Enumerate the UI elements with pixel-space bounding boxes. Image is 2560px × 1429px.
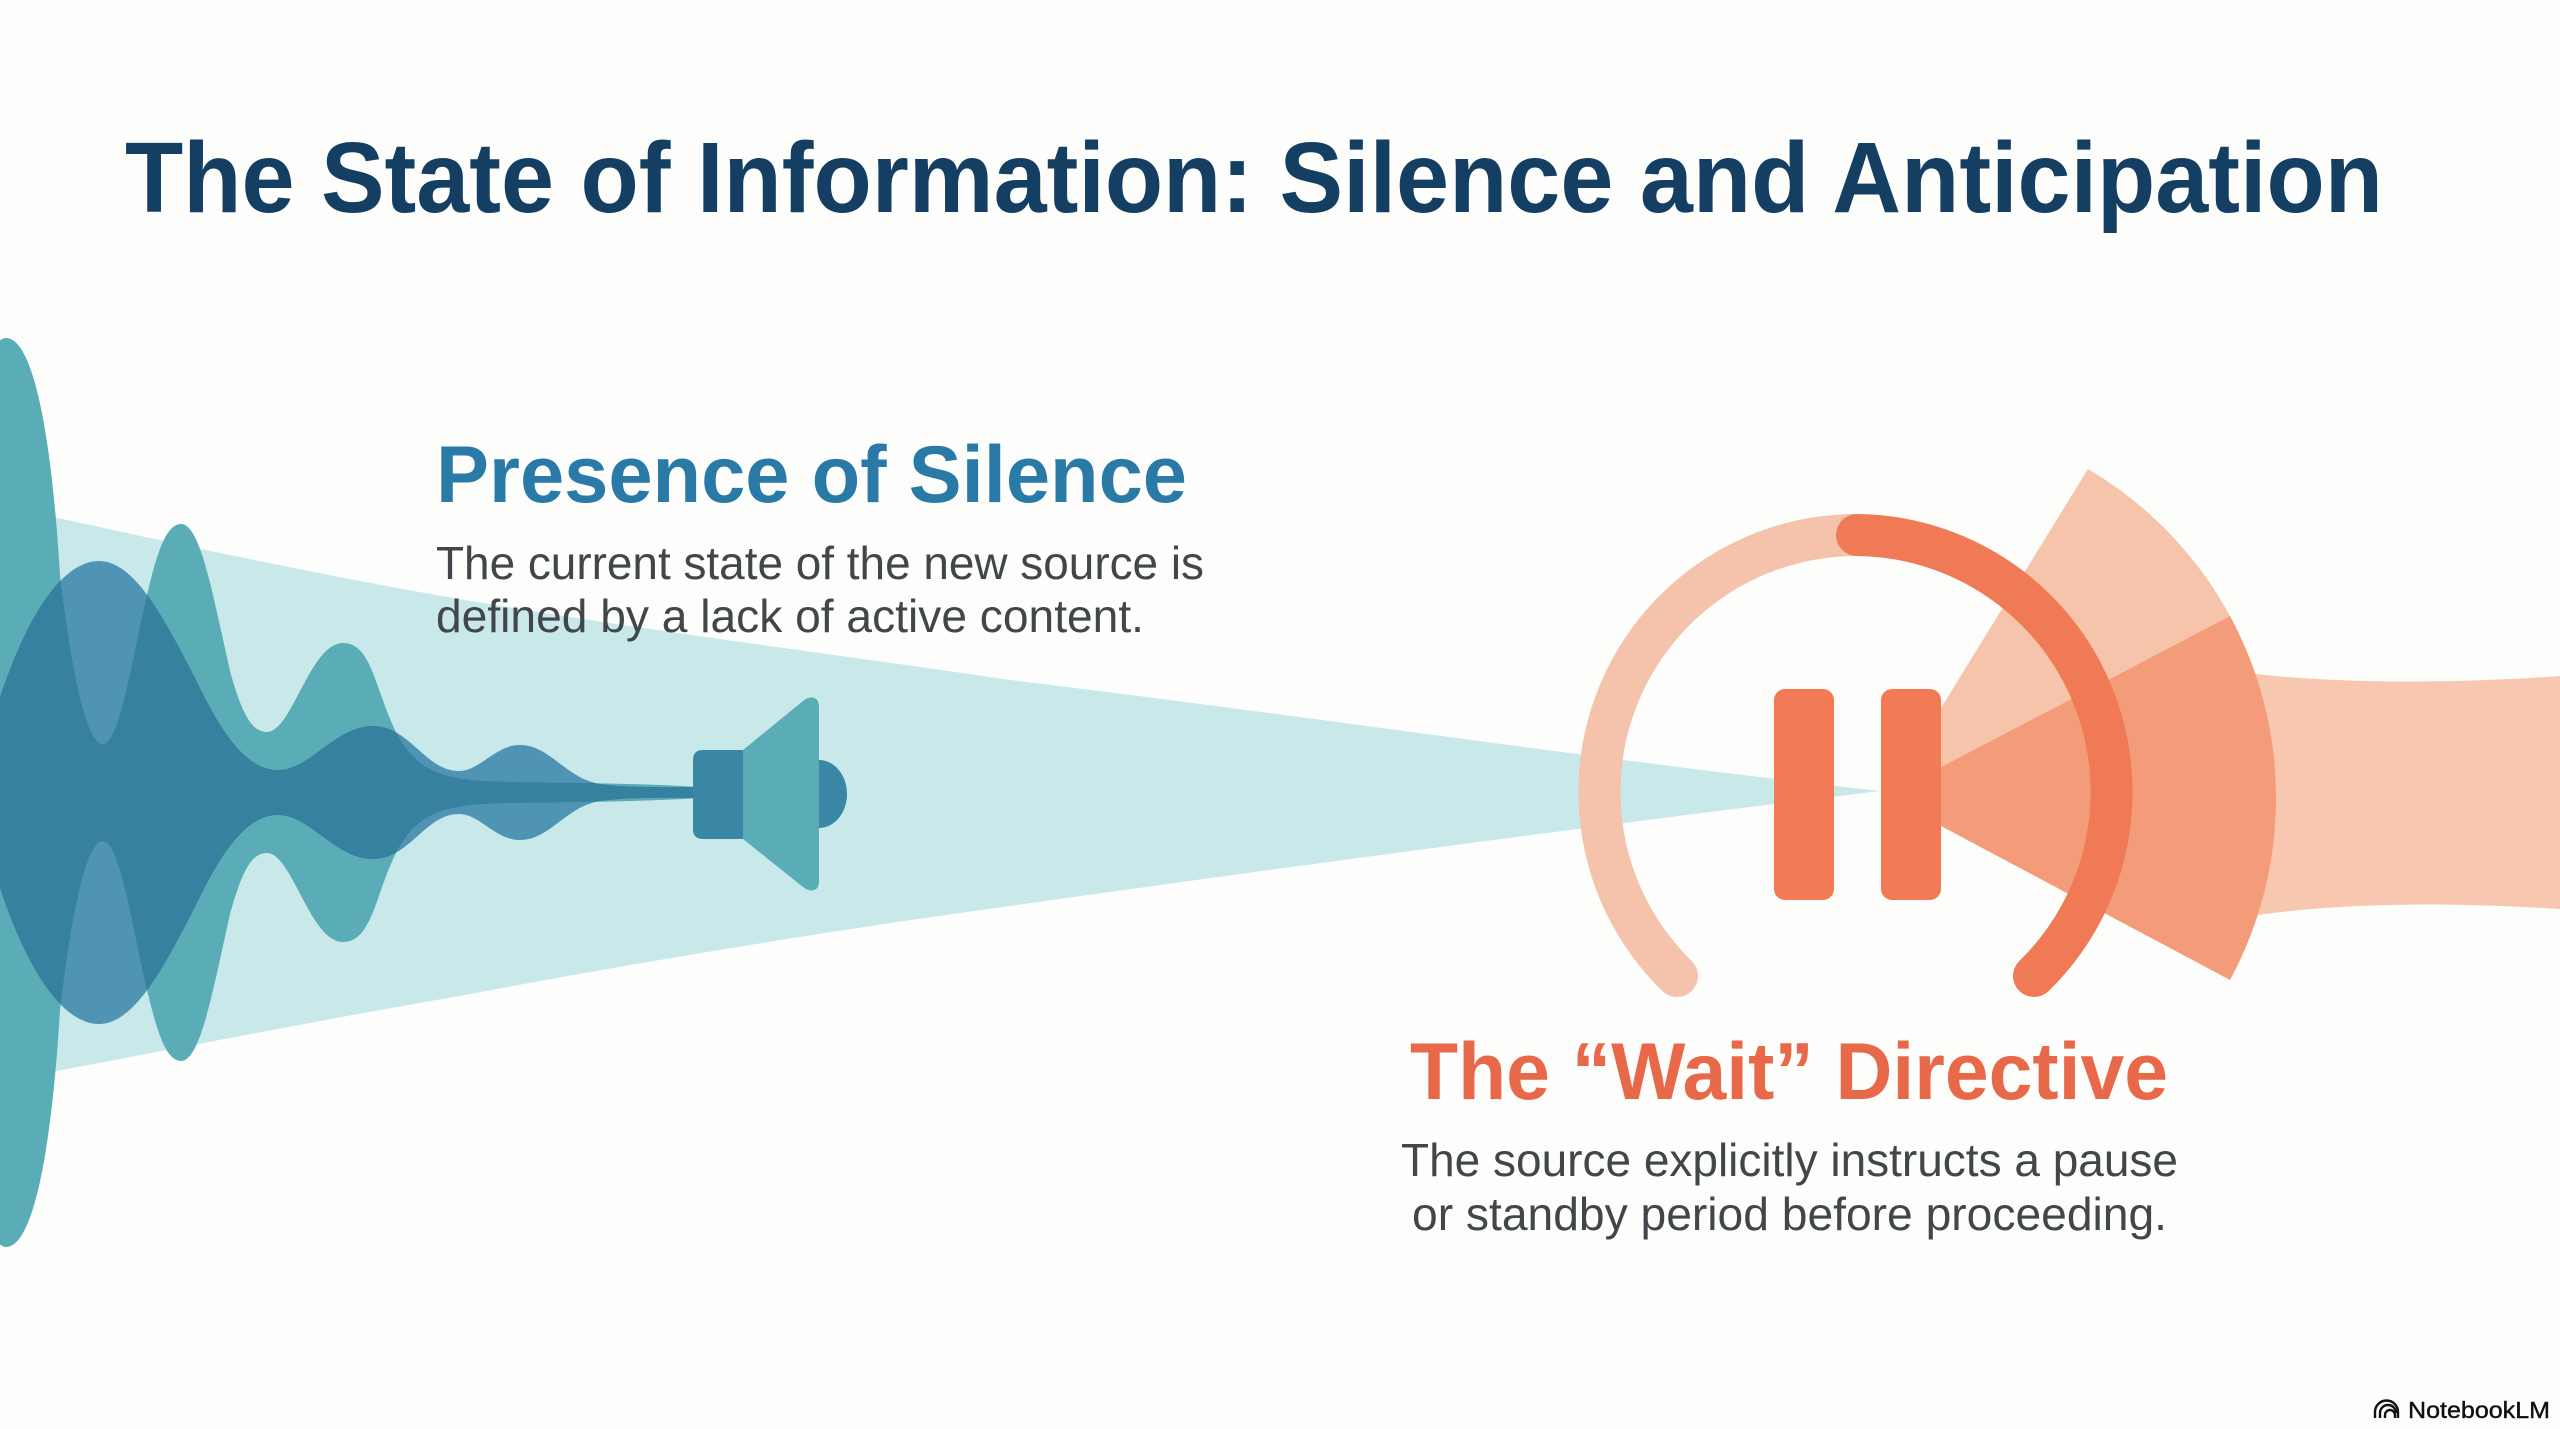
text block: wait directive description xyxy=(1401,1134,2178,1240)
icon: main fan sector xyxy=(1941,616,2276,980)
text block: presence of silence description: The current state of the new source is xyxy=(436,537,1204,589)
icon: upper fan sector xyxy=(1941,469,2230,767)
text block: wait directive description: The source explicitly instructs a pause xyxy=(1401,1134,2178,1186)
text block: presence of silence description xyxy=(436,537,1204,642)
text block: presence of silence description: defined by a lack of active content. xyxy=(436,590,1144,642)
teal outer waveform xyxy=(0,338,700,1247)
text block: wait directive description: or standby period before proceeding. xyxy=(1412,1188,2167,1240)
watermark text: NotebookLM xyxy=(2408,1397,2550,1423)
ring progress xyxy=(1857,535,2112,976)
icon: notebooklm logo xyxy=(2375,1400,2398,1418)
ring track xyxy=(1599,535,1857,976)
speaker magnet box xyxy=(693,750,743,839)
waveform overlap area xyxy=(0,561,700,1024)
heading: presence of silence: Presence of Silence xyxy=(436,430,1187,520)
icon: speaker xyxy=(693,697,847,891)
blue inner waveform xyxy=(0,561,700,1024)
notebooklm watermark xyxy=(2375,1397,2550,1423)
icon: pause symbol xyxy=(1774,689,1941,900)
outgoing sound band xyxy=(2240,672,2560,918)
sound beam narrowing toward the pause icon xyxy=(40,514,1880,1074)
speaker dome xyxy=(791,760,847,828)
title: The State of Information: Silence and Anticipation xyxy=(125,122,2383,234)
heading: the wait directive: The “Wait” Directive xyxy=(1410,1027,2168,1117)
speaker cone xyxy=(743,697,819,891)
icon: layered sound waveform xyxy=(0,338,700,1247)
icon: progress ring xyxy=(1599,535,2112,976)
